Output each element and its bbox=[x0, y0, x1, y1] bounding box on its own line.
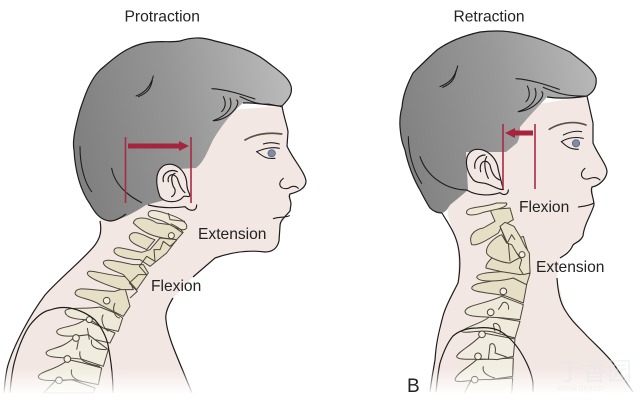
spine: vertebrae bbox=[38, 210, 187, 393]
label: extension left: Extension bbox=[198, 226, 266, 243]
outline: head, face and neck bbox=[400, 31, 633, 392]
heading: protraction: Protraction bbox=[124, 9, 200, 26]
outline: head, face and neck bbox=[4, 38, 306, 393]
arrow: forward bbox=[128, 141, 189, 151]
measurement lines bbox=[503, 124, 535, 189]
shoulder outline bbox=[436, 328, 533, 392]
skin: head and neck bbox=[4, 106, 306, 393]
watermark: 丁香园 bbox=[557, 358, 632, 386]
bottom fade bbox=[0, 368, 640, 395]
label: extension right: Extension bbox=[536, 259, 604, 276]
heading: retraction: Retraction bbox=[454, 9, 525, 26]
label: flexion right: Flexion bbox=[519, 199, 569, 216]
label: flexion left: Flexion bbox=[151, 278, 201, 295]
panel: retraction figure bbox=[400, 31, 633, 395]
hair strands, eye, nose and mouth bbox=[408, 66, 600, 207]
spine: vertebrae bbox=[455, 203, 530, 395]
arrow: backward bbox=[505, 128, 533, 138]
skin: head and neck bbox=[430, 96, 633, 392]
hair strands, eye, nose and mouth bbox=[80, 76, 298, 219]
hair bbox=[73, 38, 291, 221]
panel letter B: B bbox=[407, 376, 420, 397]
watermark: www.dxy.cn bbox=[556, 383, 604, 393]
hair bbox=[400, 31, 596, 213]
panel: protraction figure bbox=[4, 38, 306, 393]
measurement lines bbox=[126, 137, 191, 203]
ear bbox=[466, 149, 508, 195]
ear bbox=[148, 164, 197, 210]
shoulder outline bbox=[10, 307, 113, 393]
